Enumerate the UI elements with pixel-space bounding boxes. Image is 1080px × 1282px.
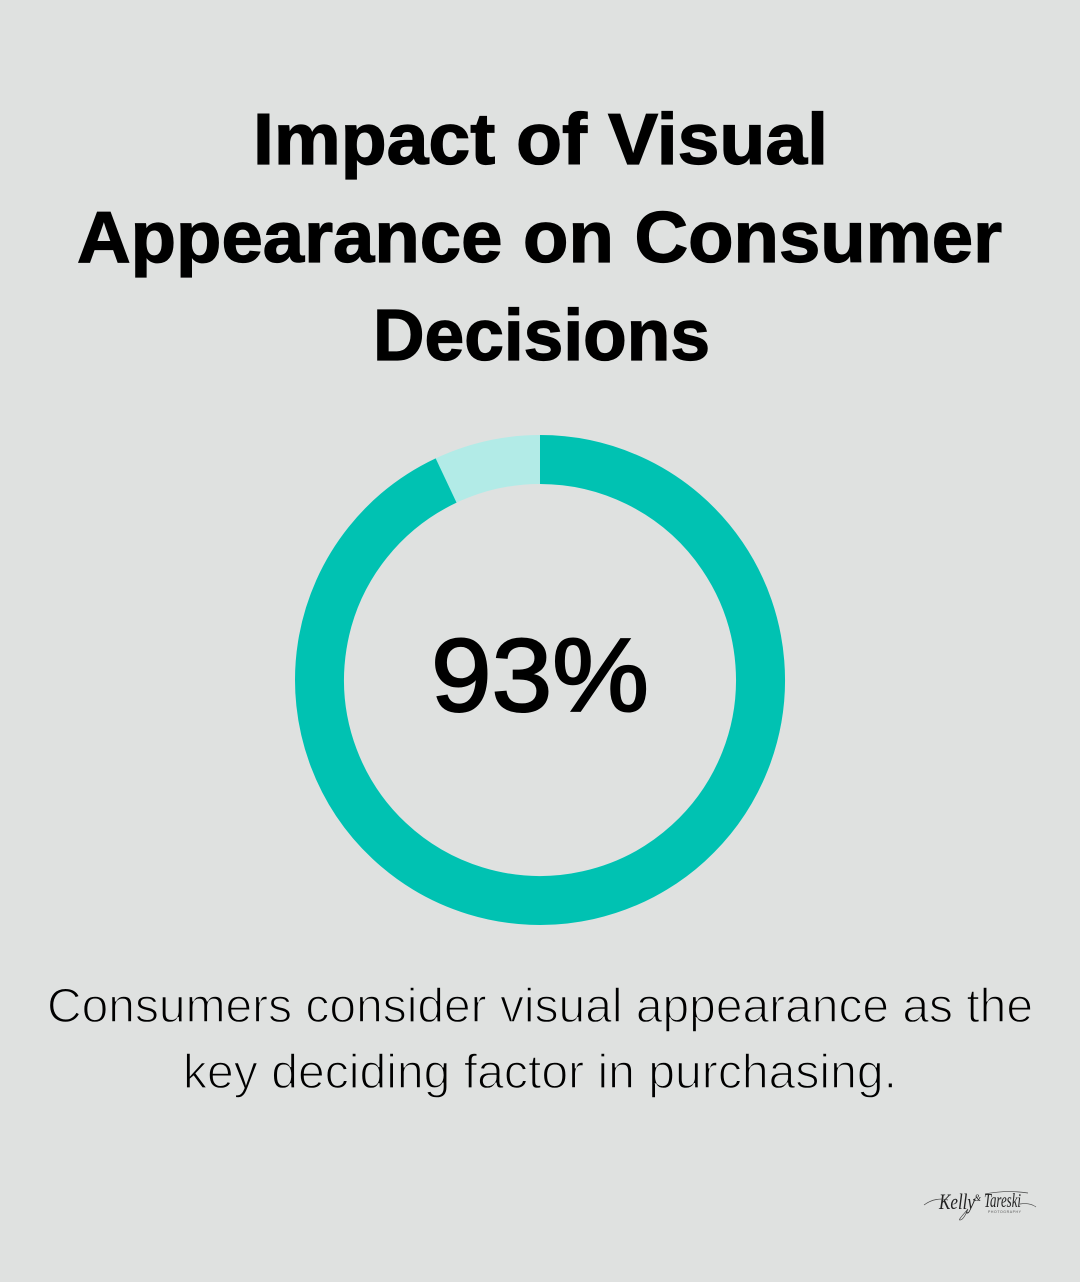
signature logo: Tareski	[984, 1190, 1021, 1212]
title: Impact of Visual	[253, 100, 828, 180]
title: Appearance on Consumer	[77, 198, 1002, 278]
description text: key deciding factor in purchasing.	[183, 1046, 897, 1099]
description text: Consumers consider visual appearance as the	[47, 980, 1033, 1033]
signature logo	[924, 1189, 1036, 1220]
description text	[47, 980, 1033, 1099]
title: Decisions	[373, 296, 710, 376]
signature logo: PHOTOGRAPHY	[988, 1210, 1022, 1214]
donut track: remaining 7 percent	[320, 460, 760, 900]
center value: 93%	[431, 618, 649, 734]
donut chart: 93 percent	[320, 460, 761, 900]
donut arc: 93 percent	[320, 460, 761, 900]
signature logo: &	[974, 1193, 981, 1203]
title	[77, 100, 1002, 376]
signature logo: Kelly	[938, 1189, 975, 1214]
